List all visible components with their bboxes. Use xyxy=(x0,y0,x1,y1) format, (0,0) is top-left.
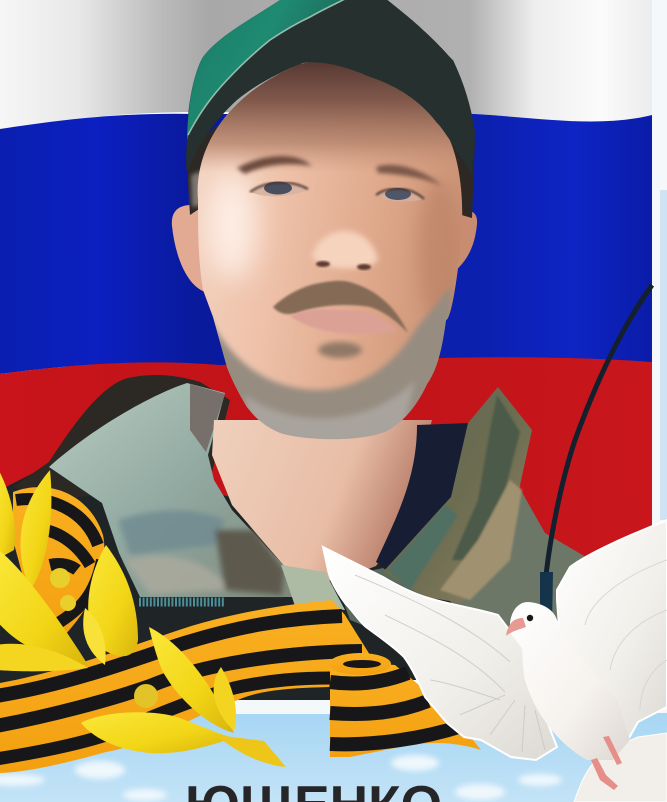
jacket: green chest below collar xyxy=(335,568,430,640)
leaf one xyxy=(0,465,15,560)
light right edge strip xyxy=(648,0,667,802)
right shoulder fabric xyxy=(440,487,591,640)
dove: foot one xyxy=(603,736,622,765)
dove: foot two xyxy=(591,758,618,790)
jacket: camouflage smudges xyxy=(118,511,284,595)
right eye xyxy=(376,188,424,202)
left ear xyxy=(172,205,205,292)
collar highlights xyxy=(388,395,522,600)
branch tip xyxy=(217,735,286,767)
beard stubble xyxy=(214,286,454,440)
white dove xyxy=(323,520,667,802)
large lower leaf xyxy=(81,712,232,753)
ribbon: fold loop xyxy=(329,653,391,675)
flag: red stripe xyxy=(0,357,652,570)
St George ribbon xyxy=(0,487,481,773)
ribbon: right tail stripes xyxy=(330,673,462,744)
laurel branch: lower xyxy=(81,627,286,767)
berry two xyxy=(60,595,76,611)
flag: blue stripe xyxy=(0,114,652,374)
side hair xyxy=(186,120,475,218)
dark collar and shadow at neck xyxy=(376,423,470,572)
ribbon: black stripe two xyxy=(0,651,362,726)
cap green panel xyxy=(187,0,347,140)
jacket: left hood panel xyxy=(49,383,293,597)
leaf four xyxy=(0,548,88,665)
berry three xyxy=(134,684,158,708)
right brow xyxy=(376,165,442,186)
cheek highlight xyxy=(206,170,258,280)
small leaf xyxy=(83,608,106,665)
dove: eye xyxy=(527,615,533,621)
cap crown and brim dark xyxy=(186,0,475,175)
flag: white stripe xyxy=(0,0,652,129)
leaf three xyxy=(88,545,138,656)
right collar panel xyxy=(383,387,532,603)
jacket: zipper teeth xyxy=(139,598,225,606)
antenna base xyxy=(540,572,553,625)
face xyxy=(198,62,462,440)
nose xyxy=(312,231,378,270)
ribbon: main band xyxy=(0,600,370,773)
small upper leaf xyxy=(214,667,236,731)
neck xyxy=(212,420,432,582)
grey temple hair xyxy=(191,170,204,207)
lips xyxy=(290,309,397,334)
jacket: dark hood behind xyxy=(13,375,230,500)
forehead shadow xyxy=(200,62,457,168)
leaf two xyxy=(20,470,51,590)
cap xyxy=(186,0,475,175)
dove: beak xyxy=(506,618,526,636)
Russian flag background xyxy=(0,0,652,570)
ribbon: upper left coil xyxy=(13,487,104,640)
right ear xyxy=(450,212,477,275)
mustache xyxy=(273,281,408,333)
chin patch xyxy=(318,342,362,358)
berry one xyxy=(50,568,70,588)
ribbon: black stripe three xyxy=(0,678,332,759)
long upper leaf xyxy=(149,627,234,733)
dove: left wing xyxy=(323,547,557,760)
ribbon: right tail xyxy=(330,660,481,757)
jacket: dark base under everything xyxy=(0,465,575,760)
dove: tail xyxy=(574,733,667,802)
left eye xyxy=(250,182,308,196)
jacket: camo shirt patch xyxy=(281,565,345,610)
ribbon: black stripe one xyxy=(0,616,342,696)
cap brim edging xyxy=(188,0,347,135)
jacket: hood seam xyxy=(190,384,225,452)
sky panel with clouds xyxy=(0,700,667,802)
leaf five xyxy=(0,644,88,671)
laurel branch: upper left xyxy=(0,465,138,671)
right cheek shade xyxy=(417,184,458,307)
dove: body xyxy=(510,602,630,760)
antenna xyxy=(546,285,652,575)
left brow xyxy=(237,156,312,174)
dove: right wing xyxy=(557,520,667,745)
